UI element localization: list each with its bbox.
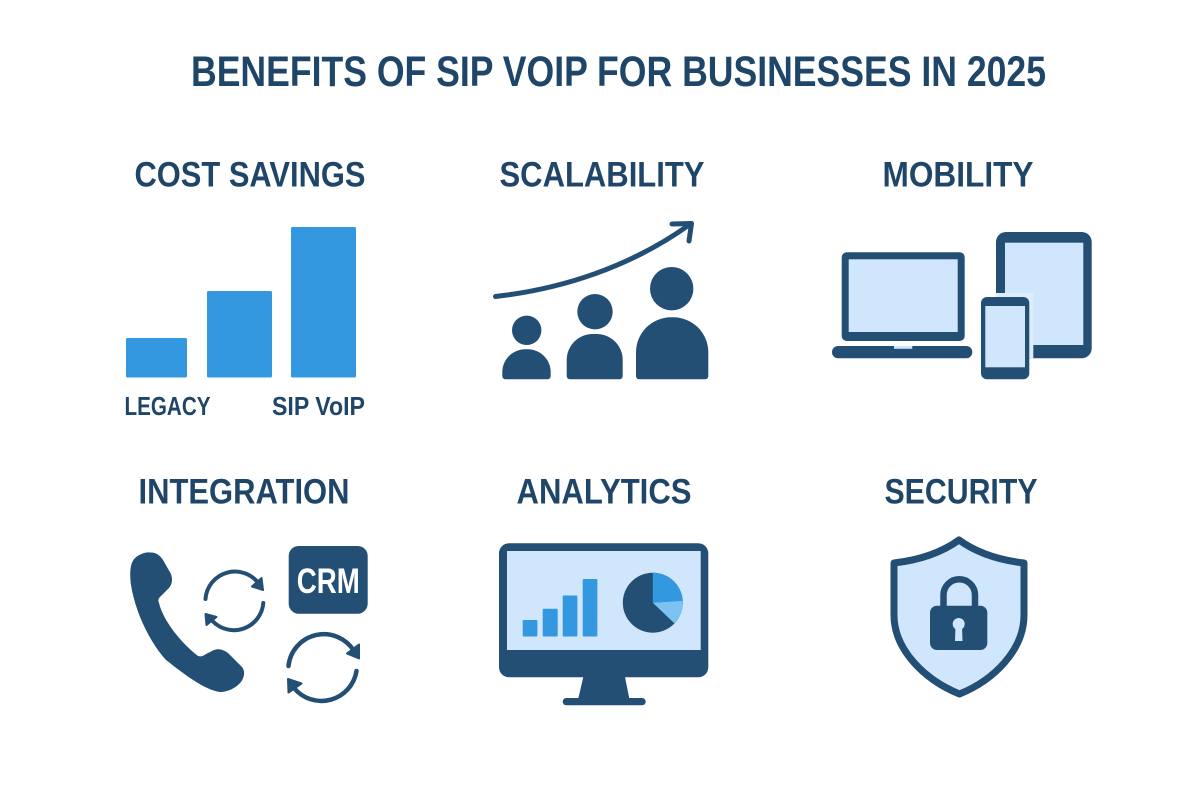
label: sip voip: SIP VoIP [272,391,365,421]
bar chart [126,227,356,378]
title: BENEFITS OF SIP VOIP FOR BUSINESSES IN 2025 [191,48,1046,96]
heading: integration: INTEGRATION [138,472,350,512]
heading: mobility: MOBILITY [882,156,1034,194]
icon: phone handset [130,552,244,692]
icon: monitor [499,543,708,705]
pie chart [623,573,683,633]
icon: devices [832,232,1092,379]
icon: crm badge: CRM [297,562,360,601]
heading: security: SECURITY [884,472,1038,512]
bar chart: monitor [523,579,597,636]
heading: cost savings: COST SAVINGS [134,156,366,194]
icon: crm badge [289,546,368,614]
heading: analytics: ANALYTICS [516,472,692,512]
panel: cost savings [124,156,366,421]
panel: mobility [832,156,1092,379]
icon: three people [502,267,708,379]
icon: sync large [288,634,359,701]
icon: padlock [930,579,987,650]
label: legacy: LEGACY [124,391,210,421]
panel: security [884,472,1038,694]
panel: analytics [499,472,708,705]
panel: scalability [496,156,708,379]
heading: scalability: SCALABILITY [500,156,704,194]
icon: shield [894,540,1024,694]
icon: sync small [206,572,263,630]
icon: growth arrow [496,224,692,296]
panel: integration [130,472,368,701]
